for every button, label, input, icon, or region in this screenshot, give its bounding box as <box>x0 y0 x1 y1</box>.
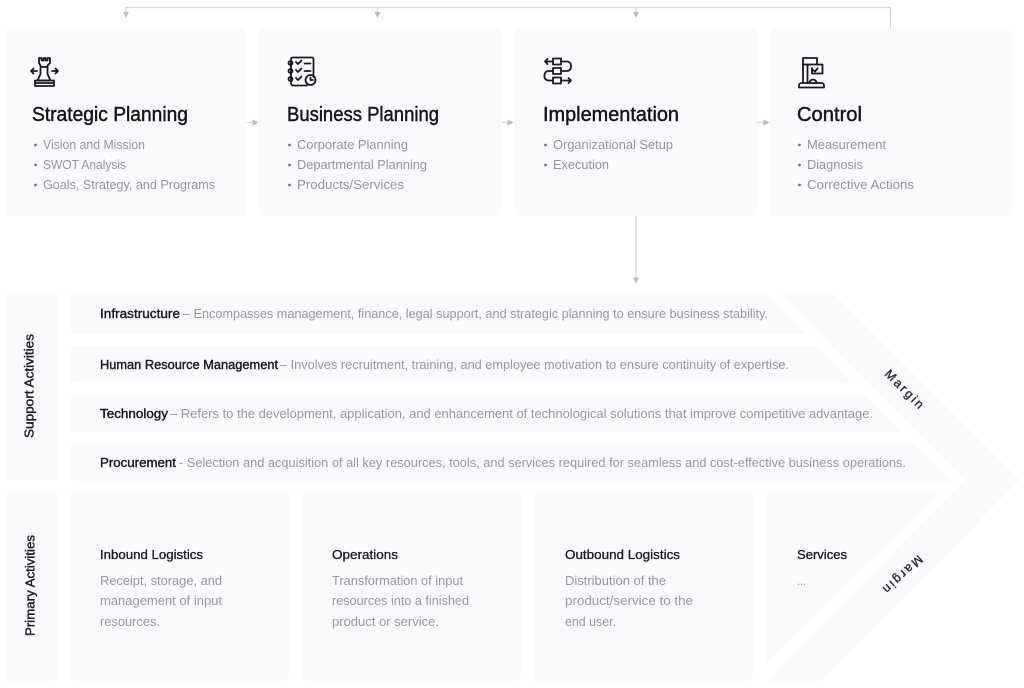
arrow: feedback loop connector from Control to all stages <box>123 8 890 29</box>
list: Diagnosis <box>807 157 863 172</box>
arrow: implementation down to value chain <box>633 216 639 284</box>
list: Organizational Setup <box>553 137 673 152</box>
panel: outbound logistics: Outbound Logistics <box>565 548 680 562</box>
arrow: strategic to business <box>247 120 258 126</box>
list <box>34 137 215 192</box>
panel: infrastructure row: Infrastructure <box>100 307 180 321</box>
icon: checklist with clock <box>288 57 316 86</box>
label: bottom margin: Margin <box>878 552 926 598</box>
list: Corrective Actions <box>807 177 915 192</box>
panel: procurement row: - Selection and acquisition of all key resources, tools, and services required for seamless and cost-effective business operations. <box>179 456 906 470</box>
panel: Control <box>770 29 1012 216</box>
panel: human resource management row: – Involves recruitment, training, and employee motivation to ensure continuity of expertise. <box>280 358 789 372</box>
list: Vision and Mission <box>43 137 145 152</box>
list <box>798 137 915 192</box>
panel: support activities label: Support Activities <box>22 334 36 438</box>
list <box>288 137 427 192</box>
list: Products/Services <box>297 177 405 192</box>
panel: services: Services <box>797 548 847 562</box>
panel: inbound logistics <box>70 492 289 681</box>
panel: inbound logistics: Inbound Logistics <box>100 548 203 562</box>
panel: margin chevron <box>768 293 1020 681</box>
list: Corporate Planning <box>297 137 408 152</box>
panel: Business Planning <box>259 29 501 216</box>
panel: Strategic Planning <box>5 29 247 216</box>
arrow: implementation to control <box>757 120 770 126</box>
icon: process flow <box>544 58 571 84</box>
panel: procurement row: Procurement <box>100 456 177 470</box>
list: Measurement <box>807 137 886 152</box>
panel: technology row <box>70 395 902 432</box>
panel: outbound logistics <box>533 492 753 681</box>
panel: outbound logistics: Distribution of the <box>565 573 666 588</box>
list: Goals, Strategy, and Programs <box>43 177 215 192</box>
panel: inbound logistics: management of input <box>100 593 222 608</box>
heading: Strategic Planning <box>32 104 188 126</box>
panel: inbound logistics: resources. <box>100 614 160 629</box>
panel: operations: Operations <box>332 548 398 562</box>
list: Departmental Planning <box>297 157 427 172</box>
panel: primary activities label: Primary Activities <box>24 535 38 636</box>
panel: infrastructure row <box>70 293 805 334</box>
list: Execution <box>553 157 609 172</box>
panel: operations: resources into a finished <box>332 593 469 608</box>
panel: operations: product or service. <box>332 614 439 629</box>
panel: outbound logistics: end user. <box>565 614 616 629</box>
panel: human resource management row: Human Resource Management <box>100 358 279 372</box>
list: SWOT Analysis <box>43 157 126 172</box>
heading: Business Planning <box>287 104 439 126</box>
panel: operations <box>302 492 521 681</box>
panel: operations: Transformation of input <box>332 573 463 588</box>
icon: control machine <box>799 58 824 88</box>
label: top margin: Margin <box>882 367 928 413</box>
panel: procurement row <box>70 444 952 481</box>
panel: human resource management row <box>70 346 853 383</box>
panel: services <box>767 492 940 663</box>
panel: technology row: – Refers to the development, application, and enhancement of technological solutions that improve competitive advantage. <box>170 407 873 421</box>
panel: Implementation <box>515 29 757 216</box>
panel: infrastructure row: – Encompasses management, finance, legal support, and strategic planning to ensure business stability. <box>183 307 768 321</box>
icon: chess rook with arrows <box>31 58 58 86</box>
heading: Implementation <box>543 104 679 126</box>
panel: inbound logistics: Receipt, storage, and <box>100 573 222 588</box>
panel: technology row: Technology <box>100 407 169 421</box>
panel: primary activities label <box>5 492 58 681</box>
list <box>544 137 673 172</box>
heading: Control <box>797 104 862 126</box>
panel: support activities label <box>5 293 58 480</box>
arrow: business to implementation <box>502 120 514 126</box>
panel: services: ... <box>797 573 806 588</box>
panel: outbound logistics: product/service to the <box>565 593 693 608</box>
